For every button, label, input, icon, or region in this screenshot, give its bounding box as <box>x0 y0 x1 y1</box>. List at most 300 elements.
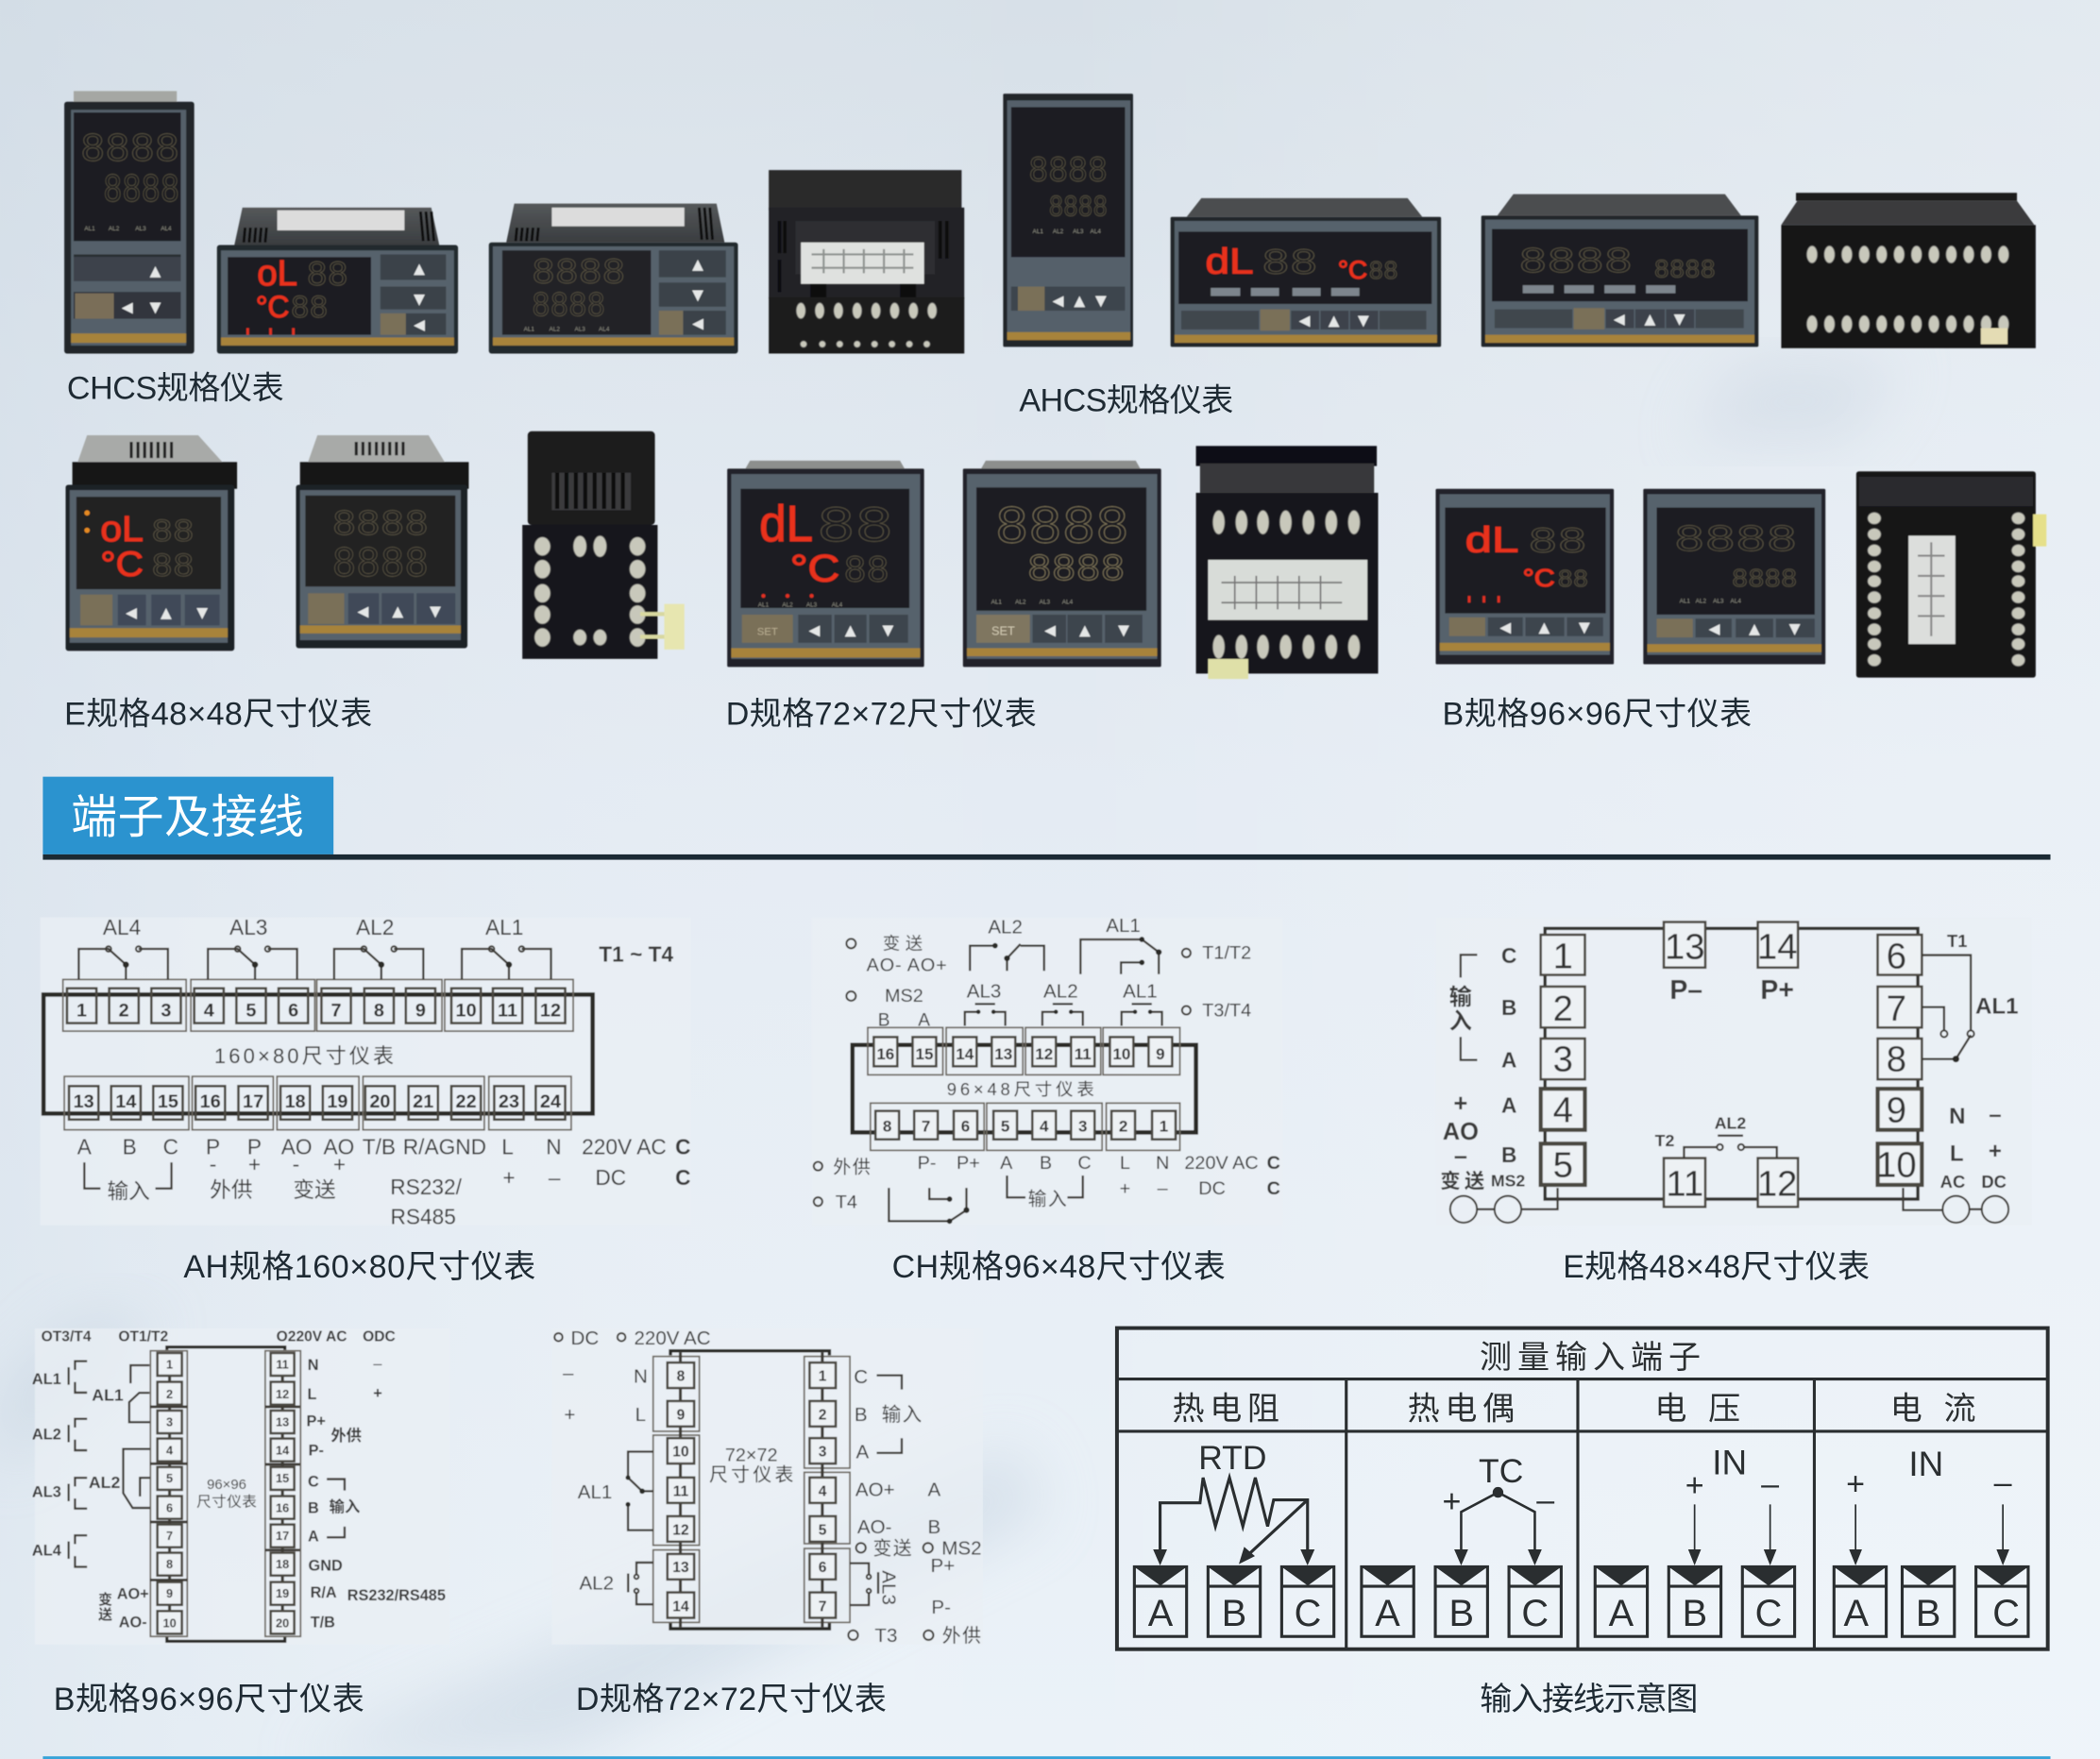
meter: D front with red display: SET <box>757 626 778 637</box>
wiring diagram: E 48×48: A <box>1501 1093 1516 1118</box>
meter: E front unlit: ▲ <box>392 602 403 619</box>
meter: D front with red display: AL1 <box>758 602 770 609</box>
wiring diagram: E 48×48: B <box>1501 1142 1516 1167</box>
wiring diagram: B 96×96: AL3 <box>32 1484 61 1501</box>
meter: AHCS vertical front: AL2 <box>1053 228 1064 235</box>
meter: E front with red display: 88 <box>151 516 195 551</box>
meter: CHCS horizontal unlit: ▼ <box>692 287 703 304</box>
meter: CHCS vertical front: ▲ <box>150 262 161 279</box>
column: RTD wiring: C <box>1295 1593 1321 1634</box>
wiring diagram: B 96×96: 14 <box>276 1443 290 1457</box>
wiring diagram: D 72×72: 1 <box>819 1368 827 1384</box>
meter: E front unlit <box>296 435 468 648</box>
wiring diagram: CH 96×48: T4 <box>836 1192 857 1212</box>
meter: AHCS horizontal with red display: ▼ <box>1358 313 1369 330</box>
section heading: 端子及接线 <box>42 777 2051 860</box>
meter: D front with red display: 88 <box>817 499 893 557</box>
meter: E front with red display: °C <box>100 545 144 584</box>
wiring diagram: E 48×48: + <box>1989 1139 2002 1164</box>
wiring diagram: B 96×96: P- <box>309 1443 324 1460</box>
wiring diagram: B 96×96: 96×96 <box>207 1478 246 1493</box>
meter: CHCS vertical front: ◀ <box>122 298 133 315</box>
meter: CHCS vertical front: AL2 <box>109 226 120 232</box>
meter: AHCS vertical front: ◀ <box>1053 292 1064 309</box>
meter: D front with red display: ▲ <box>845 621 856 638</box>
wiring diagram: AH 160×80: + <box>333 1152 346 1176</box>
wiring diagram: CH 96×48: C <box>1267 1178 1280 1199</box>
wiring diagram: E 48×48: 4 <box>1553 1091 1573 1131</box>
column: current wiring: + <box>1846 1466 1865 1502</box>
wiring diagram: AH 160×80: C <box>675 1165 691 1190</box>
column: TC wiring: – <box>1536 1482 1554 1518</box>
column headers: 电 压 <box>1654 1391 1740 1427</box>
meter: D front with red display: ▼ <box>882 621 893 638</box>
wiring diagram: B 96×96: A <box>308 1529 319 1546</box>
wiring diagram: B 96×96: 20 <box>276 1615 289 1630</box>
column: voltage wiring: B <box>1683 1593 1707 1634</box>
column: voltage wiring <box>1595 1444 1795 1636</box>
footer rule <box>42 1756 2051 1759</box>
wiring diagram: D 72×72: 5 <box>819 1522 827 1538</box>
column: voltage wiring: + <box>1685 1467 1704 1503</box>
wiring diagram: E 48×48: P– <box>1669 975 1702 1006</box>
meter: CHCS vertical front: ▼ <box>150 298 161 315</box>
wiring diagram: B 96×96: 7 <box>166 1529 173 1543</box>
wiring diagram: E 48×48: B <box>1501 995 1516 1020</box>
meter: AHCS rear view <box>1781 193 2036 348</box>
wiring diagram: AH 160×80: 24 <box>540 1091 561 1112</box>
wiring diagram: CH 96×48: T3/T4 <box>1202 1001 1251 1022</box>
wiring diagram: B 96×96: 11 <box>276 1358 289 1372</box>
meter: CHCS horizontal unlit: AL2 <box>550 326 560 332</box>
wiring diagram: D 72×72: C <box>854 1366 868 1388</box>
column: current wiring: – <box>1994 1464 2012 1500</box>
column headers: 热电偶 <box>1408 1391 1515 1427</box>
meter: B front unlit <box>1643 489 1825 665</box>
wiring diagram: D 72×72: AL2 <box>579 1573 614 1595</box>
wiring diagram: E 48×48: 12 <box>1757 1164 1797 1205</box>
meter: D front unlit: 8888 <box>995 499 1129 559</box>
wiring diagram: CH 96×48: 外供 <box>833 1157 871 1177</box>
wiring diagram: E 48×48: 变送 <box>1440 1170 1484 1192</box>
meter: D front unlit: AL4 <box>1062 600 1074 606</box>
wiring diagram: B 96×96: L <box>308 1386 317 1403</box>
wiring diagram: CH 96×48: C <box>1267 1153 1280 1174</box>
wiring diagram: B 96×96: 外供 <box>330 1427 362 1445</box>
wiring diagram: B 96×96: – <box>373 1356 382 1373</box>
wiring diagram: AH 160×80: 5 <box>246 1001 256 1022</box>
meter: B front unlit: 8888 <box>1674 519 1797 562</box>
wiring diagram: D 72×72: T3 <box>874 1625 897 1647</box>
wiring diagram: B 96×96: C <box>308 1473 319 1490</box>
wiring diagram: E 48×48: P+ <box>1760 975 1794 1006</box>
meter: AHCS vertical front: ▼ <box>1095 292 1107 309</box>
wiring diagram: B 96×96: OT3/T4 <box>42 1328 92 1345</box>
wiring diagram: E 48×48: AC <box>1940 1172 1965 1192</box>
caption: E product: E规格48×48尺寸仪表 <box>64 696 372 732</box>
wiring diagram: D 72×72: 8 <box>677 1368 686 1384</box>
wiring diagram: E 48×48: 输 <box>1449 985 1472 1010</box>
column: TC wiring: C <box>1521 1593 1549 1634</box>
meter: B front with red display: 88 <box>1558 567 1588 594</box>
wiring diagram: D 72×72: 3 <box>819 1444 827 1460</box>
meter: B front with red display: °C <box>1523 566 1555 592</box>
wiring diagram: AH 160×80: 11 <box>498 1001 517 1022</box>
wiring diagram: D 72×72: DC <box>571 1328 599 1349</box>
wiring diagram: CH 96×48: T1/T2 <box>1202 943 1251 964</box>
meter: E front unlit: 8888 <box>332 540 429 589</box>
wiring diagram: CH 96×48: B <box>878 1010 890 1030</box>
meter: D front with red display: AL2 <box>782 602 793 609</box>
wiring diagram: B 96×96: 2 <box>166 1387 173 1401</box>
meter: D front unlit: ◀ <box>1044 621 1056 638</box>
caption: CHCS: CHCS规格仪表 <box>67 371 284 407</box>
wiring diagram: B 96×96: T/B <box>311 1614 335 1631</box>
meter: CHCS horizontal with red display: 88 <box>291 292 329 328</box>
wiring diagram: B 96×96: OT1/T2 <box>118 1328 169 1345</box>
wiring diagram: D 72×72: AL3 <box>878 1570 900 1605</box>
wiring diagram: E 48×48: 14 <box>1757 927 1797 968</box>
wiring diagram: D 72×72: B <box>855 1404 868 1426</box>
meter: AHCS horizontal unlit: ▲ <box>1644 311 1655 328</box>
section heading: 端子及接线: 端子及接线 <box>71 792 304 843</box>
caption: B diagram: B规格96×96尺寸仪表 <box>54 1682 364 1717</box>
wiring diagram: CH 96×48: 15 <box>915 1045 933 1063</box>
wiring diagram: CH 96×48: A <box>1000 1153 1013 1174</box>
meter: AHCS horizontal with red display: 88 <box>1369 259 1398 287</box>
column: TC wiring: + <box>1443 1483 1461 1519</box>
wiring diagram: AH 160×80: + <box>248 1152 261 1176</box>
meter: AHCS horizontal with red display: ◀ <box>1298 313 1310 330</box>
wiring diagram: B 96×96: AL1 <box>92 1386 124 1405</box>
meter: E front unlit: 8888 <box>332 505 429 546</box>
meter: AHCS horizontal with red display: 88 <box>1262 244 1318 284</box>
meter: AHCS horizontal unlit <box>1482 195 1758 347</box>
column: voltage wiring: – <box>1761 1466 1779 1502</box>
wiring diagram: CH 96×48: AL1 <box>1106 915 1141 937</box>
wiring diagram: D 72×72: B <box>927 1516 940 1538</box>
column headers: 电 流 <box>1890 1391 1976 1427</box>
wiring diagram: AH 160×80: C <box>163 1135 178 1159</box>
meter: B front unlit: AL1 <box>1680 598 1690 604</box>
meter: CHCS rear view <box>769 170 964 353</box>
wiring diagram: AH 160×80: 10 <box>456 1001 477 1022</box>
meter: E rear socket <box>522 431 685 659</box>
column: current wiring: IN <box>1908 1445 1943 1483</box>
wiring diagram: B 96×96: 6 <box>166 1500 173 1514</box>
meter: CHCS horizontal unlit <box>489 204 738 353</box>
wiring diagram: CH 96×48: 10 <box>1112 1045 1130 1063</box>
meter: B front unlit: AL2 <box>1696 598 1706 604</box>
wiring diagram: CH 96×48: 输入 <box>1028 1190 1067 1210</box>
wiring diagram: B 96×96: 输入 <box>330 1497 360 1515</box>
wiring diagram: B 96×96: P+ <box>307 1413 326 1430</box>
wiring diagram: D 72×72: A <box>856 1442 870 1463</box>
wiring diagram: E 48×48: + <box>1453 1091 1467 1117</box>
meter: B front unlit: 8888 <box>1732 567 1797 595</box>
wiring diagram: CH 96×48: B <box>1040 1153 1052 1174</box>
wiring diagram: D 72×72: MS2 <box>941 1538 982 1560</box>
wiring diagram: AH 160×80: AL1 <box>485 915 523 939</box>
wiring diagram: CH 96×48: 1 <box>1160 1118 1168 1136</box>
wiring diagram: CH 96×48: + <box>1120 1178 1130 1199</box>
wiring diagram: AH 160×80: T/B <box>363 1135 396 1159</box>
wiring diagram: B 96×96: 5 <box>166 1471 173 1485</box>
caption: D diagram: D规格72×72尺寸仪表 <box>576 1682 887 1717</box>
wiring diagram: CH 96×48: C <box>1077 1153 1092 1174</box>
meter: D front with red display: 88 <box>844 550 889 593</box>
column: TC wiring <box>1362 1452 1561 1636</box>
wiring diagram: AH 160×80: 9 <box>415 1001 426 1022</box>
column: RTD wiring: A <box>1148 1593 1174 1634</box>
table: 测量输入端子 input terminals <box>1117 1328 2048 1649</box>
wiring diagram: AH 160×80: 18 <box>285 1091 306 1112</box>
wiring diagram: D 72×72: 12 <box>672 1522 689 1538</box>
wiring diagram: B 96×96: 17 <box>276 1529 289 1543</box>
wiring diagram: B 96×96: AL2 <box>32 1427 61 1444</box>
table title: 测量输入端子 <box>1480 1340 1701 1376</box>
column: RTD wiring <box>1134 1439 1334 1636</box>
wiring diagram: B 96×96: 12 <box>276 1387 289 1401</box>
meter: CHCS vertical front: AL1 <box>84 226 95 232</box>
wiring diagram: CH 96×48 <box>812 915 1283 1226</box>
wiring diagram: B 96×96: 18 <box>276 1557 289 1571</box>
meter: D front with red display: dL <box>759 496 813 552</box>
wiring diagram: AH 160×80: AO <box>323 1135 354 1159</box>
wiring diagram: CH 96×48: 8 <box>883 1118 891 1136</box>
meter: D front with red display <box>727 461 924 667</box>
wiring diagram: E 48×48: A <box>1501 1047 1516 1072</box>
meter: D rear view <box>1196 446 1378 679</box>
meter: AHCS vertical front: 8888 <box>1028 151 1108 192</box>
wiring diagram: CH 96×48: AO- AO+ <box>867 955 947 975</box>
meter: CHCS horizontal unlit: ▲ <box>692 256 703 273</box>
meter: B front unlit: AL4 <box>1731 598 1741 604</box>
wiring diagram: AH 160×80: RS232/ <box>390 1175 463 1199</box>
wiring diagram: CH 96×48: – <box>1158 1178 1169 1199</box>
wiring diagram: CH 96×48: A <box>918 1010 930 1030</box>
meter: AHCS horizontal unlit: ◀ <box>1614 311 1625 328</box>
wiring diagram: D 72×72: – <box>563 1362 574 1384</box>
meter: E front unlit: ▼ <box>430 602 441 619</box>
meter: B front with red display: 88 <box>1528 522 1587 563</box>
meter: CHCS horizontal with red display: ▼ <box>414 291 425 308</box>
wiring diagram: D 72×72: 220V AC <box>634 1328 711 1349</box>
meter: E front with red display: 88 <box>151 548 195 586</box>
meter: CHCS horizontal with red display: oL <box>257 253 297 294</box>
wiring diagram: E 48×48: 6 <box>1887 936 1906 976</box>
wiring diagram: B 96×96: 尺寸仪表 <box>196 1494 257 1511</box>
wiring diagram: CH 96×48: 7 <box>922 1118 930 1136</box>
wiring diagram: D 72×72: 10 <box>672 1444 689 1460</box>
wiring diagram: B 96×96: R/A <box>311 1584 337 1601</box>
meter: AHCS horizontal unlit: 8888 <box>1518 243 1633 283</box>
wiring diagram: AH 160×80: N <box>546 1135 562 1159</box>
meter: AHCS horizontal with red display: dL <box>1206 241 1254 281</box>
wiring diagram: AH 160×80: 6 <box>288 1001 298 1022</box>
wiring diagram: AH 160×80: 21 <box>413 1091 433 1112</box>
wiring diagram: CH 96×48: P- <box>918 1153 936 1174</box>
meter: D front unlit: ▲ <box>1079 621 1091 638</box>
meter: D front unlit: 8888 <box>1027 549 1125 591</box>
column: current wiring: B <box>1916 1593 1940 1634</box>
meter: CHCS horizontal unlit: AL4 <box>599 326 610 332</box>
wiring diagram: AH 160×80: A <box>77 1135 93 1159</box>
wiring diagram: B 96×96: 10 <box>162 1615 177 1630</box>
wiring diagram: CH 96×48: 96×48尺寸仪表 <box>947 1079 1094 1099</box>
meter: CHCS vertical front: AL3 <box>135 226 146 232</box>
column: current wiring: C <box>1992 1593 2020 1634</box>
wiring diagram: B 96×96: 变 <box>98 1591 112 1608</box>
wiring diagram: B 96×96: 送 <box>98 1607 112 1623</box>
meter: AHCS vertical front: AL1 <box>1033 228 1043 235</box>
caption: E diagram: E规格48×48尺寸仪表 <box>1563 1249 1870 1285</box>
wiring diagram: AH 160×80: - <box>210 1152 216 1176</box>
wiring diagram: CH 96×48: 6 <box>961 1118 970 1136</box>
wiring diagram: AH 160×80: 22 <box>456 1091 477 1112</box>
meter: AHCS horizontal with red display: °C <box>1338 256 1367 284</box>
meter: CHCS horizontal unlit: AL3 <box>574 326 585 332</box>
wiring diagram: AH 160×80: 15 <box>158 1091 178 1112</box>
wiring diagram: AH 160×80: 8 <box>374 1001 384 1022</box>
wiring diagram: CH 96×48: 变送 <box>883 934 923 954</box>
meter: AHCS horizontal with red display <box>1171 198 1441 347</box>
wiring diagram: B 96×96: 3 <box>166 1415 173 1429</box>
wiring diagram: B 96×96: ODC <box>363 1328 396 1345</box>
meter: CHCS horizontal with red display: ◀ <box>414 316 425 333</box>
wiring diagram: E 48×48: 11 <box>1666 1164 1703 1205</box>
wiring diagram: E 48×48: 入 <box>1449 1008 1472 1034</box>
wiring diagram: E 48×48: AO <box>1443 1119 1479 1145</box>
meter: D front unlit: AL3 <box>1040 600 1050 606</box>
wiring diagram: B 96×96: O220V AC <box>277 1328 347 1345</box>
column: RTD wiring: RTD <box>1198 1439 1266 1477</box>
meter: CHCS horizontal with red display: 88 <box>307 257 348 296</box>
wiring diagram: AH 160×80: RS485 <box>391 1204 456 1228</box>
wiring diagram: AH 160×80: 23 <box>499 1091 519 1112</box>
wiring diagram: AH 160×80: T1 ~ T4 <box>599 941 674 966</box>
wiring diagram: CH 96×48: 2 <box>1119 1118 1127 1136</box>
meter: D front unlit: SET <box>991 623 1015 637</box>
wiring diagram: AH 160×80: 20 <box>369 1091 390 1112</box>
meter: B front with red display <box>1435 489 1614 665</box>
meter: B front with red display: ▲ <box>1538 618 1550 635</box>
wiring diagram: CH 96×48: DC <box>1198 1178 1226 1199</box>
wiring diagram: B 96×96: N <box>308 1357 319 1374</box>
wiring diagram: E 48×48 <box>1435 918 2032 1226</box>
wiring diagram: CH 96×48: 12 <box>1035 1045 1053 1063</box>
wiring diagram: CH 96×48: AL3 <box>967 981 1001 1003</box>
wiring diagram: AH 160×80: B <box>123 1135 137 1159</box>
wiring diagram: E 48×48: DC <box>1981 1172 2007 1192</box>
wiring diagram: AH 160×80: R/AGND <box>403 1135 486 1159</box>
wiring diagram: B 96×96: AO+ <box>117 1586 149 1603</box>
wiring diagram: D 72×72: 13 <box>672 1560 689 1576</box>
panel: product photos <box>64 91 2046 679</box>
column: voltage wiring: C <box>1755 1593 1782 1634</box>
wiring diagram: E 48×48: 1 <box>1553 936 1573 976</box>
wiring diagram: CH 96×48: 5 <box>1001 1118 1009 1136</box>
meter: AHCS vertical front: ▲ <box>1074 292 1085 309</box>
wiring diagram: B 96×96: AL2 <box>89 1473 121 1492</box>
meter: AHCS horizontal unlit: 8888 <box>1654 258 1716 286</box>
meter: CHCS horizontal unlit: AL1 <box>524 326 534 332</box>
wiring diagram: AH 160×80: AO <box>281 1135 313 1159</box>
wiring diagram: CH 96×48: 11 <box>1075 1045 1092 1063</box>
wiring diagram: D 72×72: 外供 <box>942 1626 981 1647</box>
meter: B rear view <box>1856 471 2046 678</box>
wiring diagram: AH 160×80: 160×80尺寸仪表 <box>214 1044 394 1068</box>
column: TC wiring: B <box>1448 1593 1474 1634</box>
wiring diagram: AH 160×80: - <box>293 1152 299 1176</box>
column: voltage wiring: IN <box>1712 1444 1747 1482</box>
wiring diagram: D 72×72: L <box>635 1404 646 1426</box>
wiring diagram: D 72×72: 变送 <box>872 1539 912 1560</box>
meter: D front with red display: AL4 <box>832 602 843 609</box>
meter: CHCS horizontal with red display <box>217 208 458 353</box>
wiring diagram: D 72×72: 9 <box>677 1407 686 1423</box>
wiring diagram: D 72×72: 6 <box>819 1560 827 1576</box>
wiring diagram: B 96×96: AL1 <box>32 1371 61 1388</box>
wiring diagram: E 48×48: AL1 <box>1975 994 2019 1020</box>
wiring diagram: B 96×96: GND <box>309 1558 343 1575</box>
wiring diagram: D 72×72: 输入 <box>882 1404 922 1426</box>
wiring diagram: CH 96×48: AL2 <box>1043 981 1078 1003</box>
wiring diagram: AH 160×80: 3 <box>161 1001 171 1022</box>
caption: B product: B规格96×96尺寸仪表 <box>1443 696 1752 732</box>
caption: CH diagram: CH规格96×48尺寸仪表 <box>892 1249 1226 1285</box>
wiring diagram: E 48×48: 5 <box>1553 1145 1573 1186</box>
wiring diagram: AH 160×80: + <box>502 1165 516 1190</box>
wiring diagram: AH 160×80: AL2 <box>356 915 394 939</box>
wiring diagram: D 72×72: AO+ <box>855 1479 895 1500</box>
wiring diagram: B 96×96: 19 <box>276 1586 289 1600</box>
wiring diagram: B 96×96: RS232/RS485 <box>347 1587 446 1604</box>
wiring diagram: CH 96×48: 13 <box>994 1045 1012 1063</box>
wiring diagram: E 48×48: 8 <box>1887 1040 1906 1080</box>
meter: AHCS horizontal unlit: ▼ <box>1674 311 1685 328</box>
wiring diagram: E 48×48: MS2 <box>1491 1172 1525 1191</box>
wiring diagram: B 96×96: 1 <box>166 1358 173 1372</box>
wiring diagram: E 48×48: 2 <box>1553 989 1573 1029</box>
meter: B front unlit: ◀ <box>1709 620 1720 637</box>
wiring diagram: D 72×72: 尺寸仪表 <box>709 1465 794 1486</box>
wiring diagram: E 48×48: L <box>1950 1142 1964 1167</box>
meter: CHCS vertical front: AL4 <box>161 226 172 232</box>
meter: D front with red display: AL3 <box>806 602 818 609</box>
wiring diagram: AH 160×80: P <box>206 1135 220 1159</box>
wiring diagram: AH 160×80: 220V AC <box>582 1135 667 1159</box>
meter: B front with red display: ◀ <box>1499 618 1511 635</box>
wiring diagram: E 48×48: 13 <box>1665 927 1705 968</box>
wiring diagram: E 48×48: T2 <box>1655 1131 1675 1150</box>
wiring diagram: B 96×96 <box>32 1328 450 1645</box>
wiring diagram: E 48×48: C <box>1501 943 1516 968</box>
wiring diagram: AH 160×80: 16 <box>200 1091 221 1112</box>
column: TC wiring: TC <box>1479 1452 1523 1490</box>
column: current wiring <box>1834 1445 2028 1636</box>
wiring diagram: AH 160×80: 19 <box>327 1091 347 1112</box>
wiring diagram: E 48×48: AL2 <box>1715 1114 1746 1133</box>
meter: AHCS horizontal with red display: ▲ <box>1329 313 1340 330</box>
wiring diagram: AH 160×80 <box>41 915 691 1228</box>
wiring diagram: AH 160×80: 变送 <box>293 1177 336 1202</box>
column: TC wiring: A <box>1375 1593 1400 1634</box>
column: voltage wiring: A <box>1609 1593 1634 1634</box>
wiring diagram: D 72×72: AO- <box>857 1516 891 1538</box>
wiring diagram: AH 160×80: P <box>247 1135 262 1159</box>
wiring diagram: D 72×72: N <box>634 1365 648 1387</box>
